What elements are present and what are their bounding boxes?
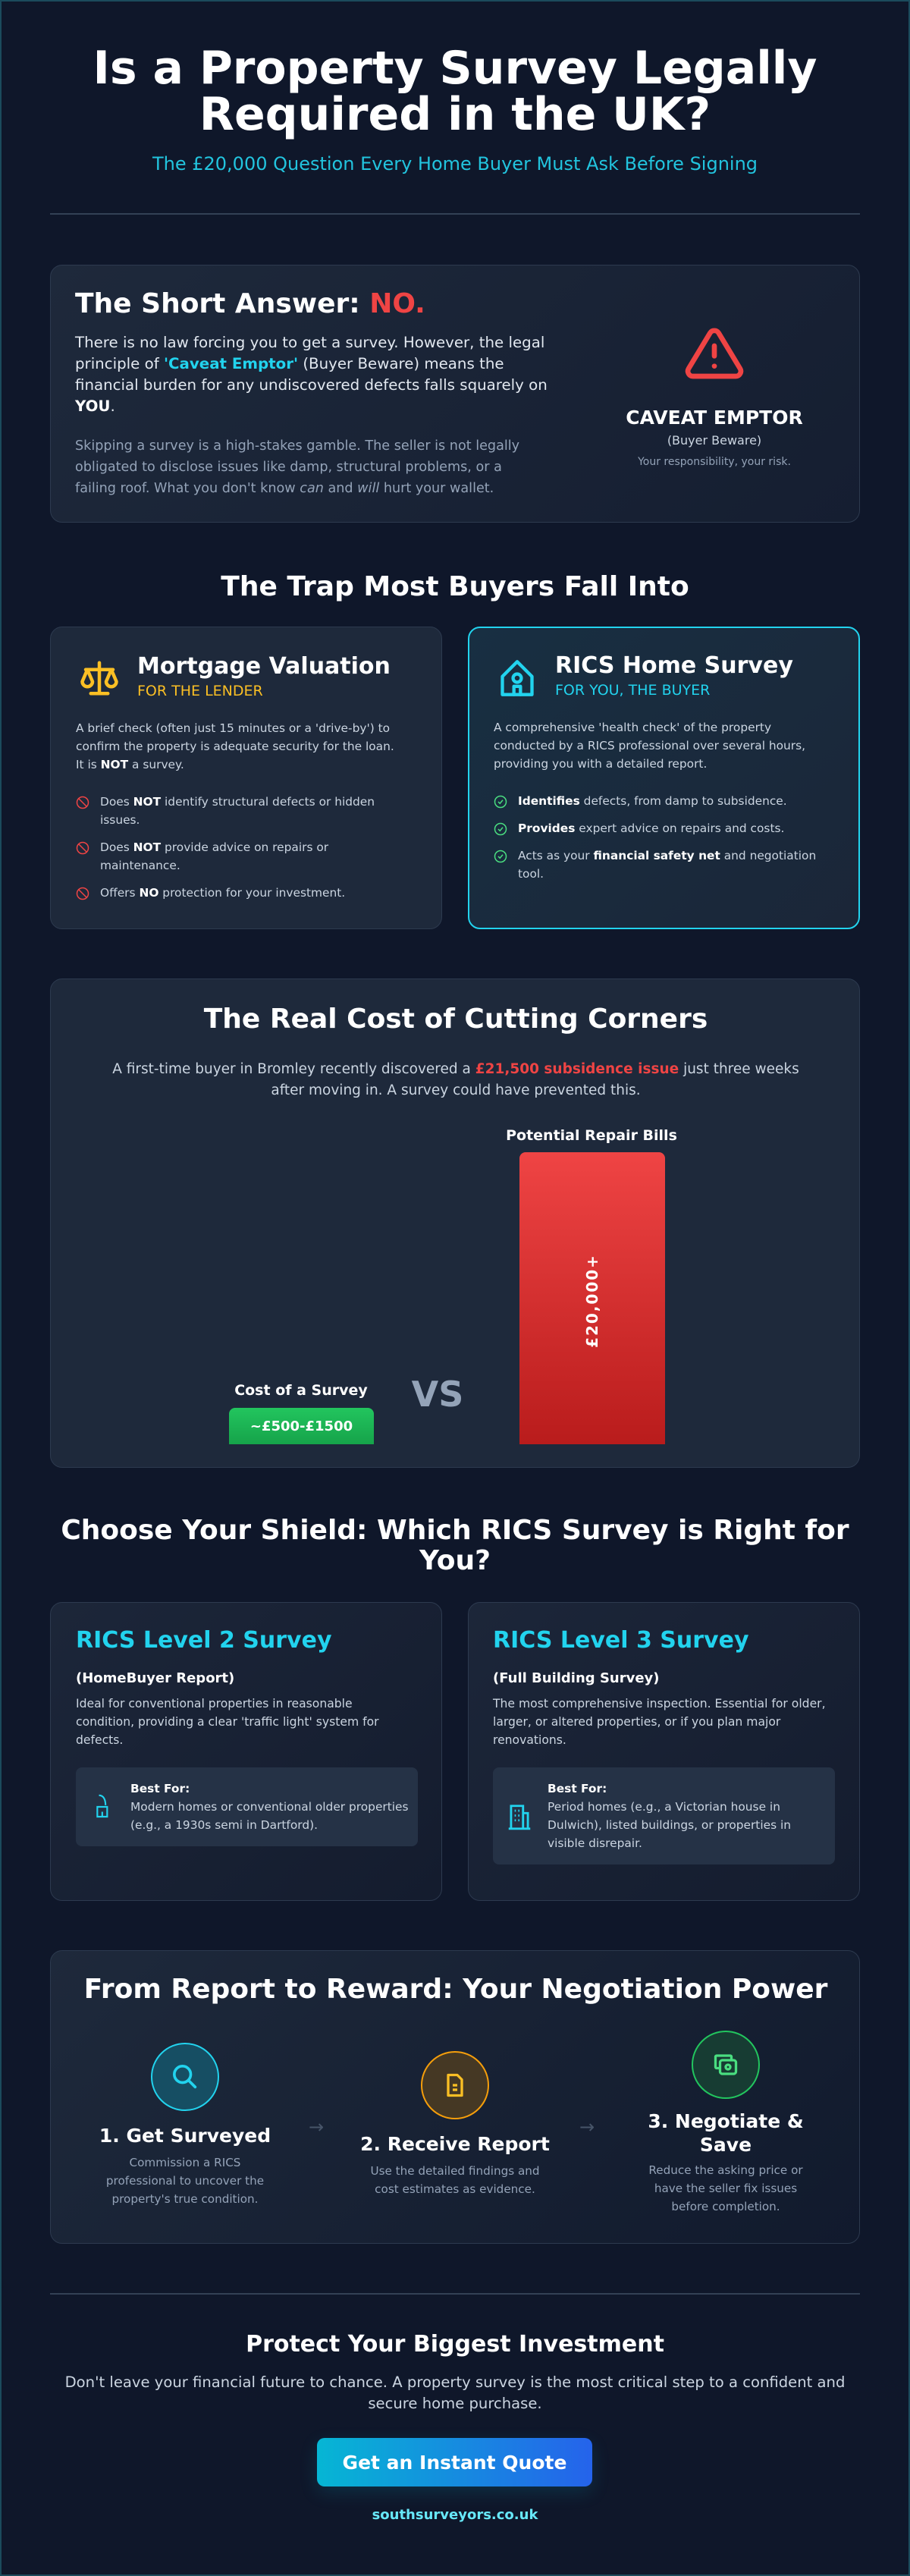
callout: caveat emptor: Your responsibility, your risk. xyxy=(638,456,791,468)
callout: best for level 2 xyxy=(76,1767,418,1846)
heading: level 3: RICS Level 3 Survey xyxy=(493,1627,749,1654)
panel: real cost xyxy=(50,979,860,1468)
bar: repair xyxy=(519,1152,665,1444)
list: valuation drawbacks: Does NOT provide advice on repairs or maintenance. xyxy=(100,840,328,872)
step 2: Use the detailed findings and cost estimates as evidence. xyxy=(370,2164,540,2196)
callout: best for level 3: Best For: xyxy=(548,1782,607,1795)
icon: house xyxy=(500,660,534,696)
heading: negotiation power: From Report to Reward: Your Negotiation Power xyxy=(84,1974,827,2005)
button: get a quote xyxy=(317,2438,592,2486)
list: valuation drawbacks: Does NOT identify structural defects or hidden issues. xyxy=(100,795,375,827)
text block: survey description: A comprehensive 'health check' of the property conducted by a RICS professional over several hours, providing you with a detailed report. xyxy=(494,721,805,771)
label: vs: VS xyxy=(412,1374,463,1415)
list: valuation drawbacks: Offers NO protection for your investment. xyxy=(100,886,345,900)
list: survey benefits xyxy=(494,794,816,881)
heading: level 2: RICS Level 2 Survey xyxy=(76,1627,332,1654)
icon: money xyxy=(692,2031,760,2099)
arrow: → xyxy=(309,2116,324,2138)
bar: survey: ~£500-£1500 xyxy=(250,1418,353,1434)
callout: caveat emptor: (Buyer Beware) xyxy=(667,433,761,448)
icon: document xyxy=(421,2051,489,2119)
heading: mortgage valuation: Mortgage Valuation xyxy=(137,653,391,680)
list: survey benefits: Provides expert advice on repairs and costs. xyxy=(518,821,784,835)
list: survey benefits: Identifies defects, from damp to subsidence. xyxy=(518,794,787,808)
step 1 xyxy=(99,2043,271,2206)
text block: valuation description xyxy=(76,721,394,771)
list: valuation drawbacks xyxy=(76,795,375,900)
panel: mortgage valuation xyxy=(50,627,442,929)
step 2 xyxy=(360,2051,550,2196)
panel: short answer xyxy=(50,265,860,523)
label: cost of survey: Cost of a Survey xyxy=(234,1382,368,1399)
bar: survey xyxy=(229,1408,374,1444)
callout: caveat emptor xyxy=(626,328,803,468)
callout: caveat emptor: CAVEAT EMPTOR xyxy=(626,407,803,429)
step 1: 1. Get Surveyed xyxy=(99,2125,271,2147)
panel: rics home survey: FOR YOU, THE BUYER xyxy=(555,682,710,699)
panel: level 3: (Full Building Survey) xyxy=(493,1670,660,1686)
bar chart: survey vs repair xyxy=(229,1127,677,1444)
text block: law explanation: There is no law forcing you to get a survey. However, the legal principle of 'Caveat Emptor' (Buyer Beware) means the financial burden for any undiscovered defects falls squarely on YOU. xyxy=(75,334,548,415)
title: Is a Property Survey Legally xyxy=(93,42,817,95)
step 2: 2. Receive Report xyxy=(360,2133,550,2155)
subtitle: The £20,000 Question Every Home Buyer Must Ask Before Signing xyxy=(152,153,758,174)
text block: level 2 description: Ideal for conventional properties in reasonable condition, providing a clear 'traffic light' system for defects. xyxy=(76,1697,379,1747)
website url: southsurveyors.co.uk xyxy=(372,2507,538,2523)
text block: bromley case: A first-time buyer in Bromley recently discovered a £21,500 subsidence issue just three weeks after moving in. A survey could have prevented this. xyxy=(112,1061,799,1098)
footer text: Don't leave your financial future to chance. A property survey is the most critical step to a confident and secure home purchase. xyxy=(65,2373,845,2412)
callout: best for level 2: Modern homes or conventional older properties (e.g., a 1930s semi in Dartford). xyxy=(130,1800,409,1832)
icon: magnifier xyxy=(151,2043,219,2111)
step 3: 3. Negotiate & Save xyxy=(648,2110,804,2156)
panel: mortgage valuation: FOR THE LENDER xyxy=(137,683,263,699)
heading: trap: The Trap Most Buyers Fall Into xyxy=(221,571,689,602)
panel: level 2: (HomeBuyer Report) xyxy=(76,1670,234,1686)
step 3 xyxy=(648,2031,804,2213)
text block: valuation description: A brief check (often just 15 minutes or a 'drive-by') to confirm the property is adequate security for the loan. xyxy=(76,721,394,753)
text block: level 3 description: The most comprehensive inspection. Essential for older, larger, or altered properties, or if you plan major renovations. xyxy=(493,1697,826,1747)
arrow: → xyxy=(579,2116,595,2138)
icon: home xyxy=(96,1795,108,1817)
icon: warning triangle xyxy=(686,328,743,379)
callout: best for level 3: Period homes (e.g., a Victorian house in Dulwich), listed buildings, or properties in visible disrepair. xyxy=(548,1800,791,1850)
heading: short answer: The Short Answer: NO. xyxy=(75,288,425,319)
list: survey benefits: Acts as your financial safety net and negotiation tool. xyxy=(518,849,816,881)
title xyxy=(93,42,817,141)
heading: rics home survey: RICS Home Survey xyxy=(555,652,793,679)
callout: best for level 2: Best For: xyxy=(130,1782,190,1795)
text block: gamble: Skipping a survey is a high-stakes gamble. The seller is not legally obligated to disclose issues like damp, structural problems, or a failing roof. What you don't know can and will hurt your wallet. xyxy=(75,438,519,496)
panel: level 3 xyxy=(468,1602,860,1901)
footer heading: Protect Your Biggest Investment xyxy=(246,2331,664,2358)
button: get a quote: Get an Instant Quote xyxy=(343,2452,566,2473)
label: potential repair bills: Potential Repair Bills xyxy=(506,1127,677,1144)
step 1: Commission a RICS professional to uncover the property's true condition. xyxy=(106,2156,264,2206)
icon: building xyxy=(508,1805,531,1830)
bar: repair: £20,000+ xyxy=(583,1254,601,1348)
panel: level 2 xyxy=(50,1602,442,1901)
heading: choose your shield: Choose Your Shield: Which RICS Survey is Right for You? xyxy=(61,1515,849,1576)
panel: rics home survey xyxy=(468,627,860,929)
heading: real cost: The Real Cost of Cutting Corners xyxy=(204,1004,708,1035)
title: Required in the UK? xyxy=(199,88,711,141)
text block: valuation description: It is NOT a survey. xyxy=(76,758,184,771)
step 3: Reduce the asking price or have the seller fix issues before completion. xyxy=(648,2163,803,2213)
panel: negotiation power xyxy=(50,1950,860,2244)
icon: scales xyxy=(80,661,118,695)
callout: best for level 3 xyxy=(493,1767,835,1864)
